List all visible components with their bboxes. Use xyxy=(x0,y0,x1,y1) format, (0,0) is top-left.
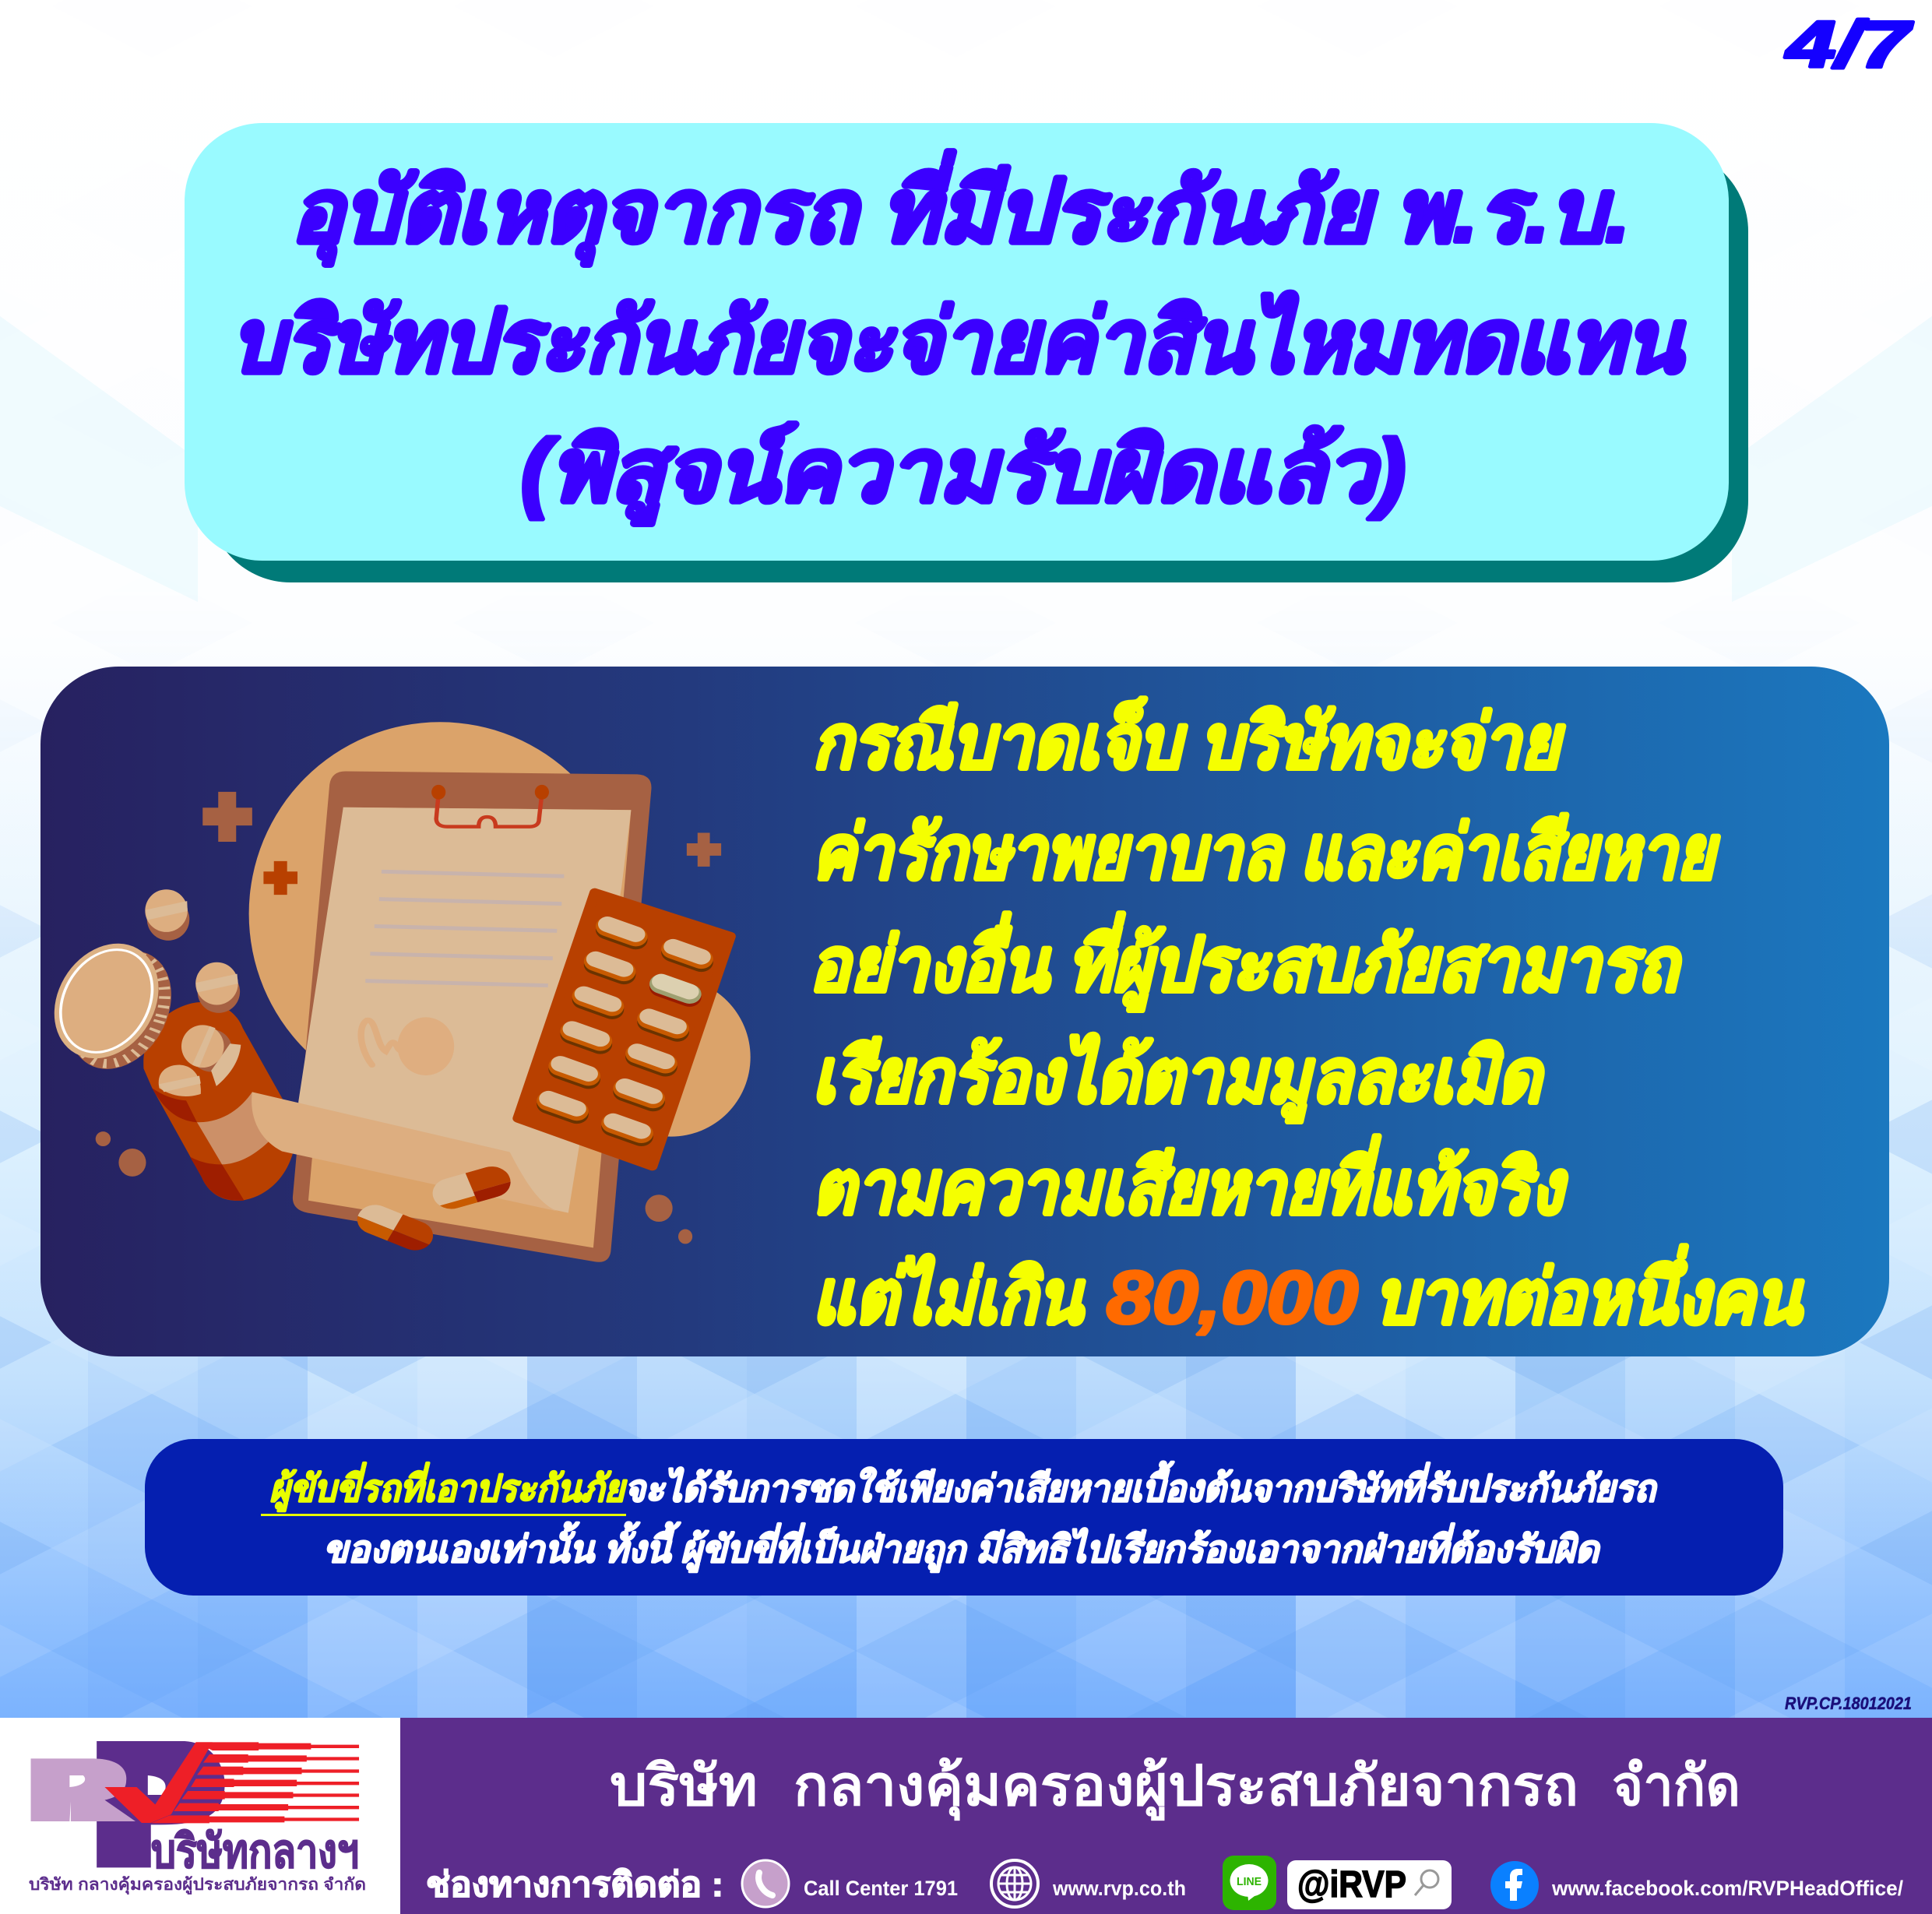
blob backdrop xyxy=(249,722,751,1137)
notice line 1 rest: จะได้รับการชดใช้เพียงค่าเสียหายเบื้องต้นจากบริษัทที่รับประกันภัยรถ xyxy=(625,1461,1658,1510)
illustration: clipboard, pills, coins xyxy=(37,722,751,1262)
pill bottle xyxy=(143,1002,296,1201)
footer logo background xyxy=(0,1718,400,1914)
title line 3: (พิสูจน์ความรับผิดแล้ว) xyxy=(521,422,1406,525)
large coin xyxy=(37,932,188,1080)
main text line 6 xyxy=(812,1244,1804,1339)
footer purple bar xyxy=(400,1718,1932,1914)
company heading: บริษัท xyxy=(610,1755,758,1817)
main text line 4: เรียกร้องได้ตามมูลละเมิด xyxy=(812,1033,1545,1123)
icon: facebook xyxy=(1490,1861,1539,1909)
main text line 5: ตามความเสียหายที่แท้จริง xyxy=(812,1135,1568,1230)
call center text: Call Center 1791 xyxy=(804,1877,958,1900)
notice panel background xyxy=(145,1439,1783,1596)
title panel xyxy=(185,123,1748,582)
capsule lower xyxy=(357,1205,433,1251)
company heading xyxy=(610,1755,1740,1821)
dots xyxy=(96,1131,692,1244)
main text line 2: ค่ารักษาพยาบาล และค่าเสียหาย xyxy=(812,811,1720,895)
small coins xyxy=(145,889,240,1013)
medical crosses xyxy=(202,792,721,895)
icon: globe xyxy=(991,1860,1038,1907)
clipboard xyxy=(293,771,652,1262)
contact label: ช่องทางการติดต่อ : xyxy=(426,1866,723,1904)
document code: RVP.CP.18012021 xyxy=(1785,1694,1912,1713)
icon: phone xyxy=(742,1860,789,1907)
main text line 1: กรณีบาดเจ็บ บริษัทจะจ่าย xyxy=(812,697,1565,784)
facebook text: www.facebook.com/RVPHeadOffice/ xyxy=(1551,1877,1903,1900)
title panel shadow xyxy=(209,150,1748,582)
logo mark xyxy=(31,1741,359,1867)
notice panel xyxy=(145,1439,1783,1596)
icon: LINE xyxy=(1223,1856,1276,1910)
background xyxy=(0,316,1932,1718)
notice highlighted text: ผู้ขับขี่รถที่เอาประกันภัย xyxy=(269,1462,628,1512)
amount 80,000: 80,000 xyxy=(1107,1256,1358,1339)
main panel xyxy=(37,667,1889,1356)
company heading: กลางคุ้มครองผู้ประสบภัยจากรถ xyxy=(794,1755,1578,1821)
title line 2: บริษัทประกันภัยจะจ่ายค่าสินไหมทดแทน xyxy=(231,291,1685,390)
blister pack xyxy=(518,892,730,1166)
LINE ID box: @iRVP xyxy=(1297,1864,1406,1905)
website text: www.rvp.co.th xyxy=(1052,1877,1186,1900)
LINE ID box xyxy=(1287,1860,1452,1909)
title line 1: อุบัติเหตุจากรถ ที่มีประกันภัย พ.ร.บ. xyxy=(290,150,1630,266)
main text line 6: บาทต่อหนึ่งคน xyxy=(1374,1244,1804,1339)
icon: LINE: LINE xyxy=(1237,1875,1262,1888)
main text line 3: อย่างอื่น ที่ผู้ประสบภัยสามารถ xyxy=(809,912,1682,1012)
main text line 6: แต่ไม่เกิน xyxy=(812,1254,1085,1339)
page number: 4/7 xyxy=(1784,8,1913,81)
company heading: จำกัด xyxy=(1612,1755,1740,1817)
paper curl xyxy=(252,1092,558,1212)
title panel face xyxy=(185,123,1729,561)
footer xyxy=(0,1718,1932,1914)
notice line 2: ของตนเองเท่านั้น ทั้งนี้ ผู้ขับขี่ที่เป็นฝ่ายถูก มีสิทธิไปเรียกร้องเอาจากฝ่ายที่ต้องรับผิด xyxy=(323,1522,1601,1573)
main panel background xyxy=(40,667,1889,1356)
capsule upper xyxy=(433,1166,511,1209)
notice underline xyxy=(261,1514,626,1516)
logo company name: บริษัท กลางคุ้มครองผู้ประสบภัยจากรถ จำกัด xyxy=(29,1875,366,1895)
logo wordmark: บริษัทกลางฯ xyxy=(151,1825,359,1877)
